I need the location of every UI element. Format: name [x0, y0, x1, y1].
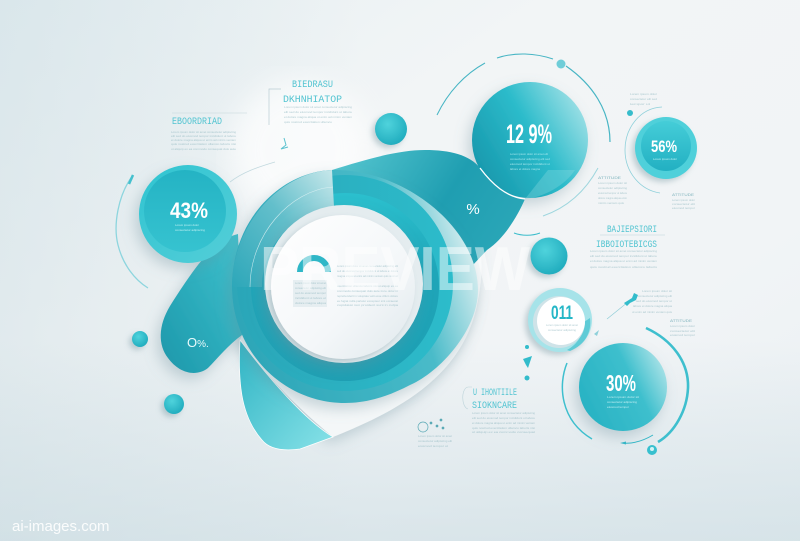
- text block: top center heading: elit sed do eiusmod tempor incididunt ut labore: [284, 110, 352, 114]
- callout: white 011 circle: consectetur adipiscing: [548, 328, 576, 332]
- callout: white 011 circle: [528, 288, 592, 352]
- small ball bottom left: [164, 394, 184, 414]
- callout: 30% circle: consectetur adipiscing: [607, 400, 637, 404]
- text: center right block: eu fugiat nulla pariatur excepteur sint occaecat: [337, 299, 398, 303]
- text block: right heading: Lorem ipsum dolor sit amet consectetur adipiscing: [590, 249, 657, 253]
- text block: top left heading: et dolore magna aliqua ut enim ad minim veniam: [171, 138, 237, 142]
- panel: main concentric ring: [232, 170, 478, 403]
- text block: beside arrow: [632, 289, 672, 314]
- text block: under large circle: minim veniam quis: [598, 201, 625, 205]
- callout: left 43% circle: Lorem ipsum dolor: [175, 223, 199, 227]
- text block: right of 30% arc: consectetur elit: [670, 329, 695, 333]
- callout: 56% circle: Lorem ipsum dolor: [653, 157, 677, 161]
- ball top: [375, 113, 407, 145]
- text block: bottom heading: elit sed do eiusmod tempor incididunt ut labore: [472, 416, 535, 420]
- icon: circle with dots: [418, 419, 444, 432]
- text block: under large circle: Lorem ipsum dolor sit: [598, 181, 627, 185]
- watermark: site name: ai-images.com: [12, 518, 110, 535]
- text: center left block: sed do eiusmod tempor: [295, 291, 326, 295]
- icon: small leaf: [594, 330, 599, 336]
- text block: top left heading: quis nostrud exercitation ullamco laboris nisi: [171, 142, 236, 146]
- text block: top left heading: Lorem ipsum dolor sit amet consectetur adipiscing: [171, 130, 236, 134]
- text block: right of 30% arc: [670, 319, 695, 337]
- white swoosh under the ring: [240, 180, 482, 437]
- text: center right block: exercitation ullamco laboris nisi ut aliquip ex ea: [337, 284, 398, 288]
- text block: right heading: et dolore magna aliqua ut enim ad minim veniam: [590, 259, 658, 263]
- text block: right heading: elit sed do eiusmod tempor incididunt ut labore: [590, 254, 657, 258]
- text block: right of 30% arc: ATTITUDE: [670, 319, 693, 323]
- text block: bottom heading: Lorem ipsum dolor sit amet consectetur adipiscing: [472, 411, 535, 415]
- text block: beside arrow: sed do eiusmod tempor ut: [636, 299, 672, 303]
- text block: under large circle: eiusmod tempor ut labore: [598, 191, 627, 195]
- text block: under large circle: ATTITUDE: [598, 175, 621, 180]
- text block: top center heading: BIEDRASU: [292, 80, 333, 91]
- callout: left 43% circle: 43%: [170, 198, 208, 223]
- text block: beside arrow: ut enim ad minim veniam quis: [632, 310, 672, 314]
- arc left of 43%: [116, 175, 148, 288]
- callout: large 129% circle: 12 9%: [506, 119, 552, 149]
- arcs around 30% circle: [562, 328, 688, 455]
- text block: top right small: [630, 92, 657, 106]
- panel: bottom light teal fin: [239, 340, 333, 450]
- text block: under large circle: dolore magna aliqua enim: [598, 196, 627, 200]
- text block: top right small: consectetur elit sed: [630, 97, 657, 101]
- pale disc: [265, 205, 423, 363]
- callout: 56% circle: [625, 107, 697, 193]
- text block: beside arrow: Lorem ipsum dolor sit: [642, 289, 672, 293]
- callout: left 43% circle: consectetur adipiscing: [175, 228, 205, 232]
- text block: right heading: BAJIEPSIORI: [607, 225, 657, 236]
- arrow: upper right: [607, 293, 638, 319]
- text: center right block: commodo consequat duis aute irure dolor in: [337, 289, 398, 293]
- text block: under 56% circle: [672, 193, 695, 210]
- text: center left block: [293, 280, 327, 307]
- text block: top right small: Lorem ipsum dolor: [630, 92, 657, 96]
- panel: top right teal blob: [332, 150, 525, 300]
- panel: lower left teal capsule: [161, 234, 242, 373]
- text: center left block: Lorem ipsum dolor sit amet: [295, 281, 326, 285]
- callout: 56% circle: 56%: [651, 137, 677, 156]
- text: center right block: sed do eiusmod tempor incididunt ut labore et dolore: [337, 269, 398, 273]
- text block: top right small: tempor ut: [630, 102, 650, 106]
- callout: white 011 circle: Lorem ipsum dolor sit amet: [546, 323, 578, 327]
- icon: small mark: [281, 138, 288, 149]
- text block: beside arrow: labore et dolore magna aliqua: [633, 304, 672, 308]
- white disc: [271, 215, 415, 359]
- label: capsule percent: O%.: [187, 335, 209, 350]
- text block: right of 30% arc: eiusmod tempor: [670, 333, 695, 337]
- text block: top center heading: et dolore magna aliqua ut enim ad minim veniam: [284, 115, 353, 119]
- text block: bottom heading: U IHONTIILE: [473, 388, 517, 399]
- text block: under 56% circle: Lorem ipsum dolor: [672, 198, 695, 202]
- text block: bottom heading: SIOKNCARE: [472, 401, 517, 412]
- callout: large 129% circle: consectetur adipiscing elit sed: [510, 157, 550, 161]
- arcs around large circle: [437, 54, 610, 216]
- text block: under large circle: [598, 175, 627, 205]
- text block: beside arrow: consectetur adipiscing elit: [638, 294, 672, 298]
- text: center right block: Lorem ipsum dolor sit amet consectetur adipiscing elit: [337, 264, 398, 268]
- text block: bottom heading: et dolore magna aliqua ut enim ad minim veniam: [472, 421, 535, 425]
- connector line: [230, 162, 275, 182]
- text block: top left heading: ut aliquip ex ea commodo consequat duis aute: [171, 147, 236, 151]
- text block: bottom small: consectetur adipiscing elit: [418, 439, 452, 443]
- text block: bottom heading: quis nostrud exercitation ullamco laboris nisi: [472, 426, 535, 430]
- text block: top center heading: [269, 80, 353, 125]
- text block: top left heading: elit sed do eiusmod tempor incididunt ut labore: [171, 134, 236, 138]
- text: center right block: magna aliqua ut enim ad minim veniam quis nostrud: [337, 274, 398, 278]
- text block: bottom small: Lorem ipsum dolor sit amet: [418, 434, 452, 438]
- small ball left: [132, 331, 148, 347]
- callout: 30% circle: [579, 343, 667, 431]
- callout: 30% circle: eiusmod tempor: [607, 405, 629, 409]
- callout: large 129% circle: [472, 82, 588, 199]
- text: center left block: dolore magna aliqua: [295, 301, 326, 305]
- text: center right block: [337, 264, 398, 307]
- text: center right block: cupidatat non proident sunt in culpa: [337, 303, 398, 307]
- label: blob percent: %: [466, 201, 480, 218]
- inner ring: [251, 193, 439, 381]
- text block: top left heading: EBOORDRIAD: [172, 117, 222, 128]
- callout: large 129% circle: Lorem ipsum dolor sit amet elit: [510, 152, 548, 156]
- text: center left block: consectetur adipiscing elit: [295, 286, 326, 290]
- callout: 30% circle: Lorem ipsum dolor sit: [607, 395, 639, 399]
- callout: white 011 circle: 011: [551, 303, 573, 324]
- text block: top left heading: [171, 113, 247, 151]
- outer ring: [232, 170, 478, 403]
- icon: small droplets: [523, 345, 532, 380]
- text block: under 56% circle: eiusmod tempor: [672, 206, 695, 210]
- callout: large 129% circle: labore et dolore magna: [510, 167, 540, 171]
- text block: bottom heading: ut aliquip ex ea commodo consequat: [472, 430, 535, 434]
- text block: top center heading: Lorem ipsum dolor sit amet consectetur adipiscing: [284, 105, 352, 109]
- text: center right block: reprehenderit in voluptate velit esse cillum dolore: [337, 294, 398, 298]
- label: arch icon: [300, 258, 328, 272]
- text block: bottom small: [418, 434, 452, 448]
- text block: bottom small: eiusmod tempor ut: [418, 444, 448, 448]
- middle ring: [237, 175, 453, 391]
- watermark: PREVIEW: PREVIEW: [260, 235, 530, 304]
- text: center left block: incididunt ut labore et: [295, 296, 326, 300]
- text block: under 56% circle: ATTITUDE: [672, 193, 695, 197]
- text block: under 56% circle: consectetur elit: [672, 202, 695, 206]
- ball right: [514, 233, 568, 274]
- text block: under large circle: consectetur adipiscing: [598, 186, 627, 190]
- text block: right heading: quis nostrud exercitation ullamco laboris: [590, 265, 658, 269]
- callout: left 43% circle: [139, 165, 237, 263]
- text block: top center heading: DKHNHIATOP: [283, 95, 342, 106]
- text block: bottom heading: [463, 387, 535, 434]
- callout: 30% circle: 30%: [606, 370, 636, 396]
- text block: top center heading: quis nostrud exercitation ullamco: [284, 120, 332, 124]
- light wedge of ring: [232, 170, 334, 287]
- text block: right heading: IBBOIOTEBICGS: [596, 240, 657, 251]
- callout: large 129% circle: eiusmod tempor incididunt ut: [510, 162, 550, 166]
- text block: right heading: [590, 225, 665, 269]
- text block: right of 30% arc: Lorem ipsum dolor: [670, 324, 695, 328]
